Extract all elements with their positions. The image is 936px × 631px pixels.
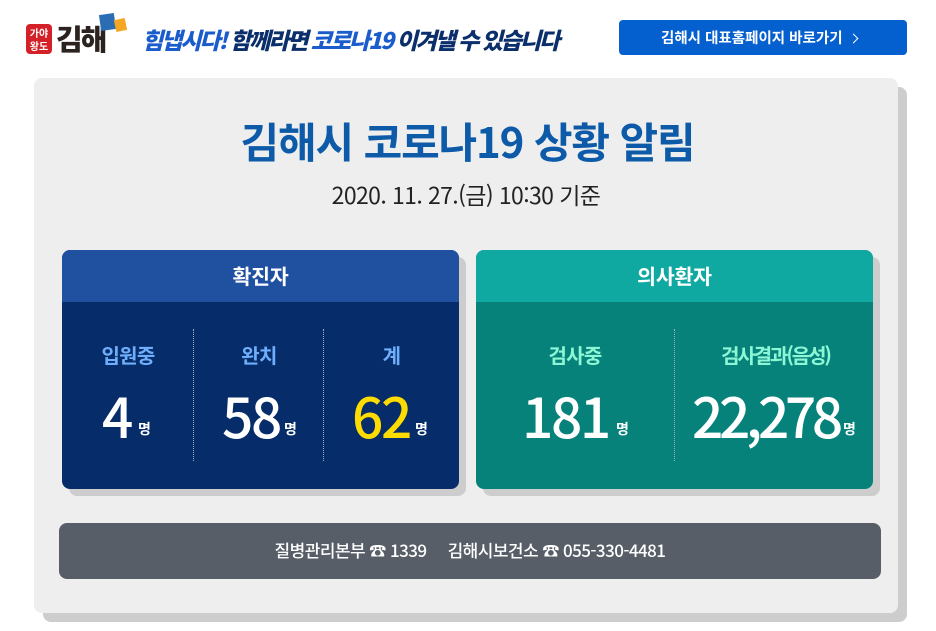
unit: 명 (616, 419, 629, 439)
logo blue tile (99, 13, 116, 31)
label: total: 계 (383, 340, 400, 369)
button: homepage link (619, 20, 907, 55)
panel shadow (43, 87, 907, 622)
unit: 명 (843, 419, 856, 439)
panel: confirmed cases (62, 250, 459, 489)
number: total 62: 62 (352, 374, 410, 454)
contact bar: 질병관리본부 ☎ 1339 김해시보건소 ☎ 055-330-4481 (275, 537, 665, 562)
number: testing 181: 181 (522, 374, 609, 454)
number: negative 22,278: 22,278 (692, 374, 839, 454)
date subtitle: 2020. 11. 27.(금) 10:30 기준 (332, 177, 600, 211)
logo orange tile (114, 18, 127, 32)
logo wordmark: 김해 (56, 17, 105, 59)
label: recovered: 완치 (241, 340, 277, 369)
label: negative results: 검사결과(음성) (721, 340, 830, 369)
logo red seal (26, 24, 52, 54)
contact bar (59, 523, 881, 579)
confirmed header: 확진자 (232, 260, 288, 290)
number: hospitalized 4: 4 (102, 374, 131, 454)
label: hospitalized: 입원중 (101, 340, 155, 369)
number: recovered 58: 58 (222, 374, 280, 454)
unit: 명 (284, 419, 297, 439)
unit: 명 (138, 419, 151, 439)
panel: suspected cases (476, 250, 873, 489)
label: testing: 검사중 (548, 340, 602, 369)
title: 김해시 코로나19 상황 알림 (240, 110, 694, 171)
suspected header: 의사환자 (637, 260, 712, 290)
logo: Gimhae city (26, 13, 128, 59)
logo red seal: 왕도 (30, 38, 48, 53)
suspected header (476, 250, 873, 302)
unit: 명 (415, 419, 428, 439)
main panel (34, 78, 898, 613)
logo red seal: 가야 (30, 25, 48, 40)
confirmed header (62, 250, 459, 302)
slogan: 힘냅시다! 함께라면 코로나19 이겨낼 수 있습니다 (142, 22, 558, 56)
button: homepage link: 김해시 대표홈페이지 바로가기 (661, 27, 843, 48)
